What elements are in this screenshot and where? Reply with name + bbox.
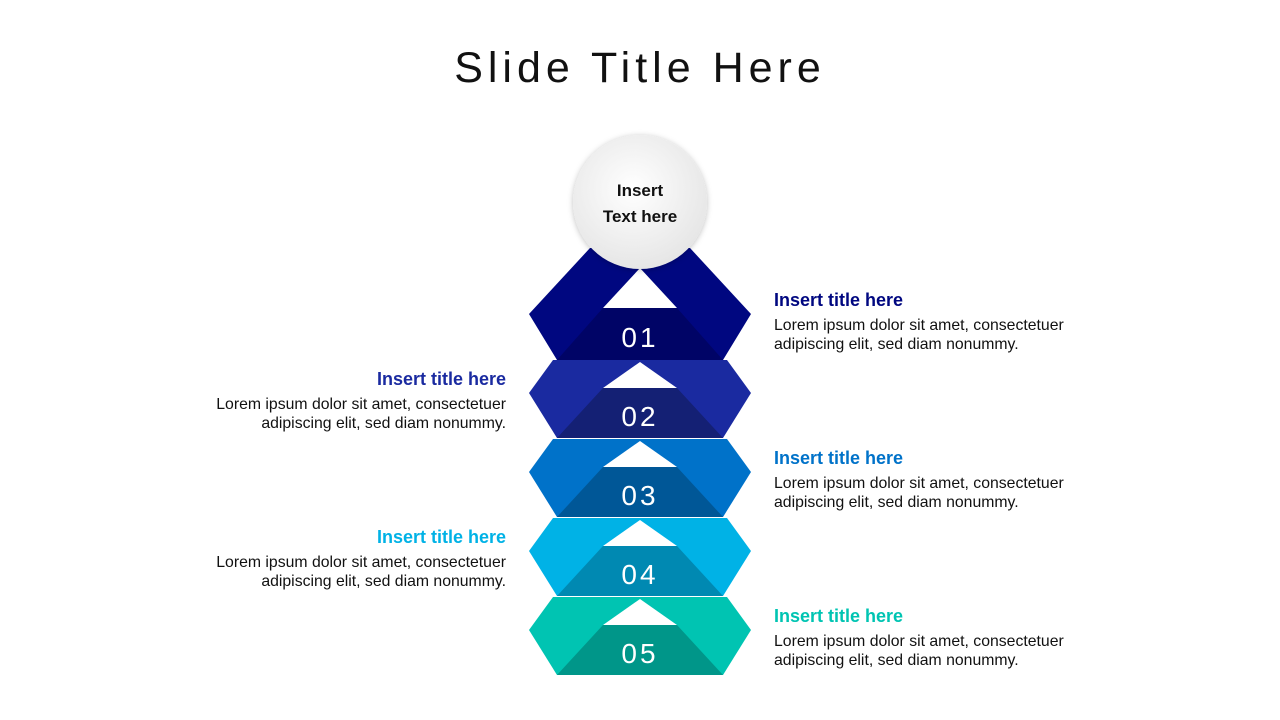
text 04: Insert title here xyxy=(377,527,506,547)
text 01 xyxy=(774,290,1064,353)
text 01: Lorem ipsum dolor sit amet, consectetuer adipiscing elit, sed diam nonummy. xyxy=(774,317,1064,353)
block 01: 01 xyxy=(621,322,659,353)
text 01: Insert title here xyxy=(774,290,903,310)
text 03: Lorem ipsum dolor sit amet, consectetuer adipiscing elit, sed diam nonummy. xyxy=(774,475,1064,511)
text 05: Lorem ipsum dolor sit amet, consectetuer adipiscing elit, sed diam nonummy. xyxy=(774,633,1064,669)
text 03: Insert title here xyxy=(774,448,903,468)
text 02 xyxy=(216,369,506,432)
circle: insert text: Insert xyxy=(617,181,663,200)
block 05 xyxy=(529,597,751,675)
text 04: Lorem ipsum dolor sit amet, consectetuer adipiscing elit, sed diam nonummy. xyxy=(216,554,506,590)
block 04: 04 xyxy=(621,559,659,590)
block 01 xyxy=(529,248,751,360)
title: Slide Title Here xyxy=(454,44,826,92)
text 05: Insert title here xyxy=(774,606,903,626)
text 02: Lorem ipsum dolor sit amet, consectetuer adipiscing elit, sed diam nonummy. xyxy=(216,396,506,432)
text 02: Insert title here xyxy=(377,369,506,389)
block 04 xyxy=(529,518,751,596)
block 02: 02 xyxy=(621,401,659,432)
block 05: 05 xyxy=(621,638,659,669)
block 03 xyxy=(529,439,751,517)
circle: insert text xyxy=(573,135,707,269)
block 02 xyxy=(529,360,751,438)
text 04 xyxy=(216,527,506,590)
block 03: 03 xyxy=(621,480,659,511)
text 03 xyxy=(774,448,1064,511)
circle: insert text: Text here xyxy=(603,207,677,226)
text 05 xyxy=(774,606,1064,669)
